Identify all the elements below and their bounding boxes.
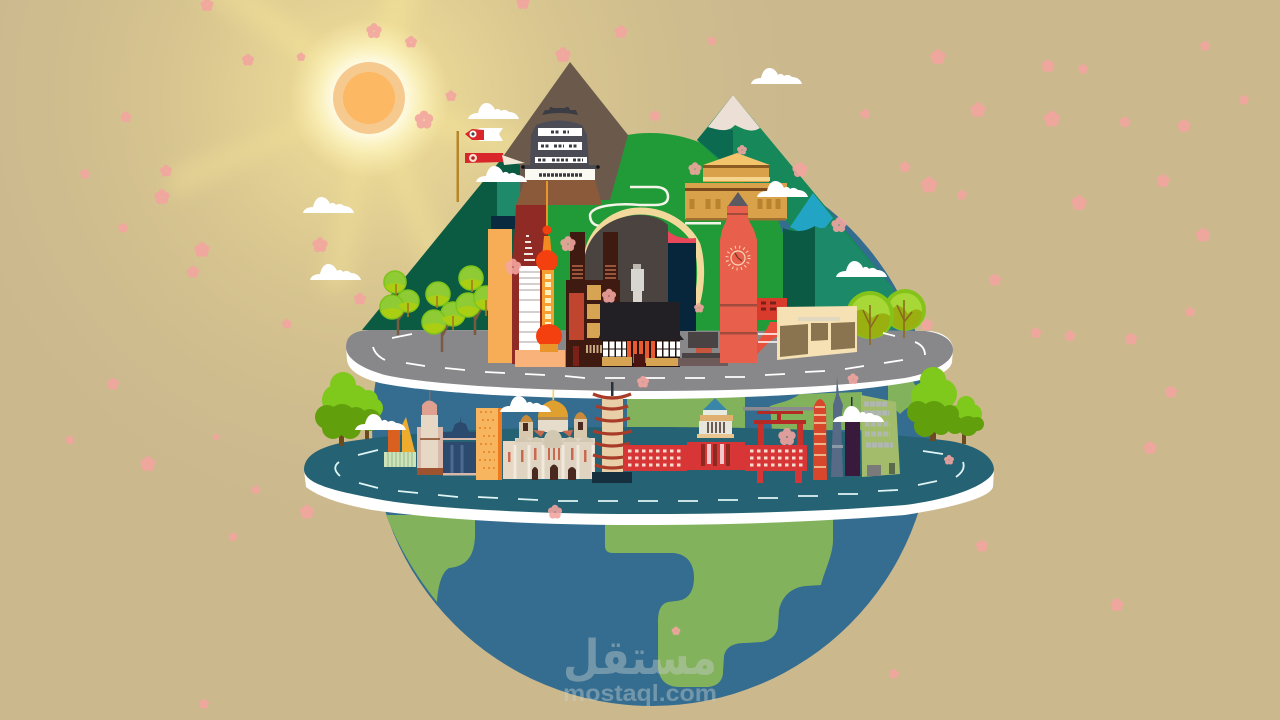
mountain: left brown and green peak <box>362 62 628 330</box>
building: small dark shrine <box>678 332 728 366</box>
earth globe <box>372 146 932 706</box>
building: orange tower <box>488 229 512 363</box>
museum building <box>685 153 787 224</box>
lower left trees <box>315 372 383 446</box>
tokyo tower red <box>737 298 787 363</box>
green hill <box>512 133 788 331</box>
sun <box>333 62 405 134</box>
land: left continent <box>386 515 475 602</box>
upper road platform <box>346 330 953 399</box>
building: domed parliament <box>697 398 734 438</box>
clock tower <box>720 192 757 363</box>
arch <box>585 211 701 332</box>
upper road dashes <box>373 333 925 378</box>
building: cathedral <box>503 390 595 480</box>
building: red ribbed tower <box>813 399 827 480</box>
building: dark red tower <box>512 205 565 367</box>
lower right trees <box>907 367 984 444</box>
torii gate <box>743 407 815 445</box>
clouds <box>303 68 887 430</box>
land: upper continents <box>627 380 925 430</box>
mountain: right snow peak <box>697 95 893 330</box>
building: orange dotted tower <box>476 408 502 480</box>
right green trees <box>846 289 926 345</box>
building: pagoda <box>592 382 632 483</box>
koinobori flags <box>456 128 525 202</box>
pearl tower <box>536 181 562 352</box>
building: green apartment <box>861 395 900 477</box>
watermark: mostaql.com <box>563 680 717 706</box>
lower road dashes <box>335 450 964 501</box>
clock face <box>727 247 749 269</box>
building: colourful blocks <box>384 417 416 467</box>
shop building <box>777 306 857 360</box>
small grey tower <box>631 264 644 303</box>
building: gate <box>443 416 476 476</box>
building: red hall <box>623 442 807 483</box>
castle on mountain <box>516 107 602 205</box>
white loop road on hill <box>590 187 668 226</box>
building: dark tower <box>845 397 860 476</box>
lower road platform <box>304 427 994 525</box>
building: sky tower <box>831 377 843 477</box>
watermark: مستقل <box>563 630 717 686</box>
land: centre continent <box>605 515 833 687</box>
sun glow and rays <box>0 0 799 528</box>
building: white tower <box>417 390 443 475</box>
left green trees on mountain <box>380 266 498 352</box>
watermark <box>563 630 717 706</box>
building: dark brick tower <box>566 232 620 367</box>
building: black roof machiya <box>598 302 684 367</box>
